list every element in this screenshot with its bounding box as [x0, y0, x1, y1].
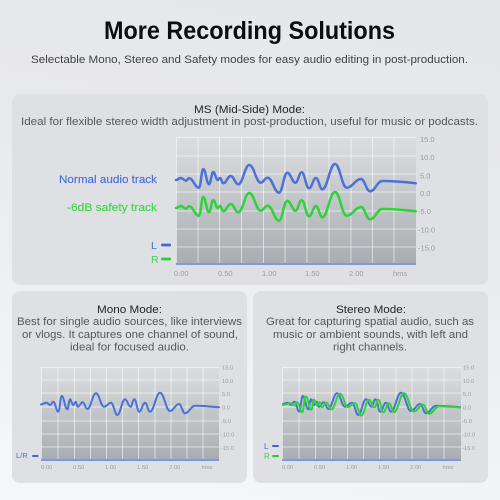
axis labels: -15.0: [418, 244, 435, 252]
axis labels: 5.0: [463, 392, 471, 398]
axis labels: -10.0: [221, 432, 234, 438]
axis labels: [41, 366, 234, 471]
description: Stereo mode: Great for capturing spatial audio, such as: [266, 316, 475, 328]
axis labels: 5.0: [420, 172, 430, 180]
subtitle: Selectable Mono, Stereo and Safety modes for easy audio editing in post-production.: [31, 54, 468, 66]
legend: L and R: R: [264, 452, 270, 461]
description: Mono mode: [17, 316, 243, 354]
heading: MS mode: MS (Mid-Side) Mode:: [194, 104, 305, 116]
axis labels: 5.0: [222, 392, 230, 398]
legend: L and R: L: [151, 240, 157, 252]
axis labels: 0.0: [420, 189, 430, 198]
axis labels: -5.0: [221, 419, 231, 425]
heading: Mono mode: Mono Mode:: [97, 304, 162, 316]
axis labels: 15.0: [463, 366, 474, 372]
description: Mono mode: Best for single audio sources, like interviews: [17, 316, 243, 328]
axis labels: 10.0: [222, 379, 233, 385]
description: Mono mode: or vlogs. It captures one channel of sound,: [22, 329, 238, 341]
axis labels: 2.00: [410, 465, 421, 471]
axis labels: -15.0: [221, 446, 234, 452]
panel: Mono mode: [12, 291, 247, 483]
legend: L and R: L: [264, 442, 269, 451]
axis labels: 1.50: [137, 465, 148, 471]
axis labels: 15.0: [420, 135, 435, 144]
label: safety track: -6dB safety track: [67, 202, 158, 214]
axis labels: 0.50: [314, 465, 325, 471]
waveform: normal track: [176, 164, 416, 193]
axis labels: [282, 366, 475, 471]
description: Mono mode: ideal for focused audio.: [70, 342, 189, 354]
axis labels: 1.00: [346, 465, 357, 471]
axis labels: 2.00: [169, 465, 180, 471]
title: More Recording Solutions: [104, 17, 395, 45]
legend: L/R: L/R: [16, 451, 28, 460]
chart: Mono waveform: [41, 366, 234, 471]
axis labels: 10.0: [463, 379, 474, 385]
axis labels: 0.50: [73, 465, 84, 471]
axis labels: 2.00: [349, 269, 364, 278]
waveforms: left and right channels: [282, 393, 463, 416]
legend: L/R: [16, 451, 38, 460]
chart: MS waveform: [174, 135, 435, 278]
axis labels: 0.00: [41, 465, 52, 471]
axis labels: 1.00: [262, 269, 277, 278]
heading: Stereo mode: Stereo Mode:: [336, 304, 406, 316]
axis labels: 1.50: [305, 269, 320, 278]
chart: Stereo waveform: [282, 366, 475, 471]
axis labels: [174, 135, 435, 278]
axis labels: 0.50: [218, 269, 233, 278]
description: MS mode: Ideal for flexible stereo width adjustment in post-production, useful for music or podcasts.: [21, 116, 478, 128]
waveform: safety track: [176, 192, 416, 221]
legend: L and R: R: [151, 254, 159, 266]
axis labels: hms: [202, 465, 213, 471]
axis labels: 0.0: [463, 406, 471, 412]
axis labels: 0.00: [174, 269, 189, 278]
legend: L and R: [151, 240, 171, 266]
axis labels: -10.0: [462, 432, 475, 438]
axis labels: -5.0: [418, 207, 431, 216]
axis labels: 1.50: [378, 465, 389, 471]
description: Stereo mode: right channels.: [333, 342, 407, 354]
axis labels: hms: [393, 269, 407, 278]
axis labels: -10.0: [418, 226, 435, 234]
description: Stereo mode: [266, 316, 475, 354]
axis labels: hms: [442, 465, 454, 471]
axis labels: 0.00: [282, 465, 293, 471]
panel: MS mode: [12, 94, 488, 285]
label: normal audio track: Normal audio track: [59, 174, 158, 186]
axis labels: 1.00: [105, 465, 116, 471]
description: Stereo mode: music or ambient sounds, with left and: [273, 329, 468, 341]
axis labels: -15.0: [462, 446, 475, 452]
legend: L and R: [264, 442, 279, 461]
panel: Stereo mode: [253, 291, 488, 483]
waveform: mono: [41, 393, 219, 415]
axis labels: 0.0: [222, 406, 230, 412]
axis labels: -5.0: [462, 419, 472, 425]
axis labels: 15.0: [222, 366, 233, 372]
axis labels: 10.0: [420, 153, 435, 162]
